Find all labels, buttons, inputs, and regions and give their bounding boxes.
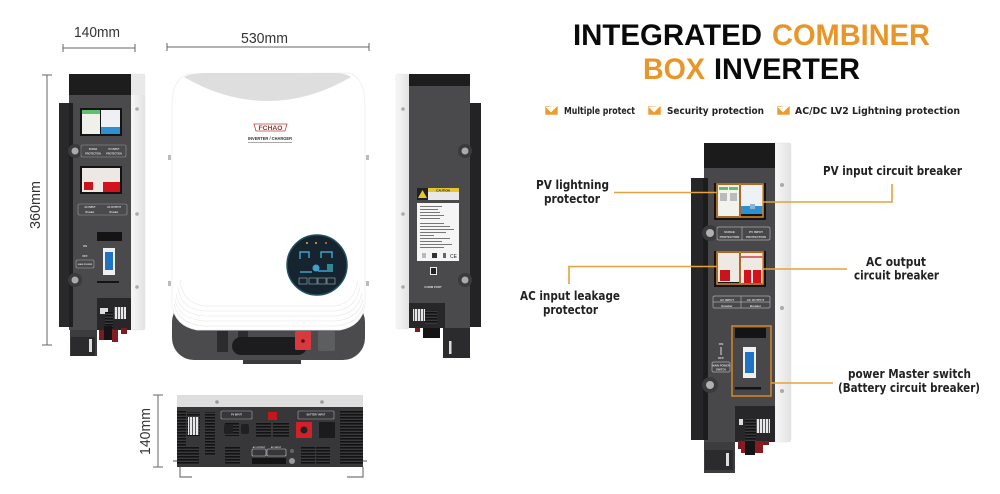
master switch: ON bbox=[719, 342, 723, 346]
callout: AC input leakage protector bbox=[520, 266, 717, 317]
master switch: SWITCH bbox=[716, 368, 726, 372]
bottom view: ports and labels: BATTERY INPUT bbox=[307, 414, 326, 416]
callout: PV input circuit breaker bbox=[763, 163, 963, 202]
left view: lower labels: AC INPUT bbox=[84, 206, 96, 209]
front view of inverter bbox=[168, 73, 369, 364]
master switch: OFF bbox=[718, 356, 724, 360]
left view: master switch: ON bbox=[83, 244, 87, 248]
left view: upper labels: PV INPUT bbox=[108, 148, 120, 151]
dimension: depth 140mm bottom view bbox=[138, 395, 163, 467]
lower labels: Breaker bbox=[750, 304, 762, 308]
bottom view: ports and labels bbox=[221, 411, 335, 464]
upper labels: PV INPUT bbox=[749, 230, 763, 234]
upper labels bbox=[717, 227, 770, 240]
left side view of inverter bbox=[59, 74, 145, 356]
callout: PV lightning protector: PV lightning bbox=[536, 177, 609, 192]
front view: brand logo bbox=[248, 124, 293, 143]
front view: brand logo: INVERTER / CHARGER bbox=[248, 136, 293, 141]
dimension: width 530mm: 530mm bbox=[241, 31, 288, 47]
left view: upper labels: SURGE bbox=[89, 148, 98, 151]
terminals bbox=[705, 406, 775, 470]
bottom view: vents bbox=[177, 410, 363, 465]
callout: AC output circuit breaker: circuit breaker bbox=[854, 268, 940, 282]
left view: lower labels: AC OUTPUT bbox=[107, 206, 122, 209]
callout: power master switch: power Master switch bbox=[848, 366, 971, 381]
dimension: depth 140mm: 140mm bbox=[74, 25, 120, 41]
feature list bbox=[545, 106, 960, 117]
bottom view: mounting feet bbox=[173, 461, 367, 477]
lower labels: AC INPUT bbox=[720, 298, 734, 302]
feature list: AC/DC LV2 Lightning protection bbox=[795, 106, 960, 117]
feature list: Security protection bbox=[667, 106, 764, 117]
dimension: depth 140mm bottom view: 140mm bbox=[138, 408, 154, 455]
callout: AC output circuit breaker bbox=[763, 254, 940, 282]
callout: PV lightning protector: protector bbox=[544, 191, 601, 206]
feature list: Multiple protect bbox=[564, 106, 635, 117]
left view: terminals bbox=[71, 298, 131, 356]
lower labels: Breaker bbox=[721, 304, 733, 308]
bottom view: ports and labels: AC OUTPUT bbox=[253, 446, 266, 449]
front view: base bbox=[172, 300, 365, 364]
left view: lower labels bbox=[78, 204, 127, 215]
left view: lower labels: Breaker bbox=[110, 211, 119, 214]
right view: comm port: COMM PORT bbox=[424, 285, 442, 289]
title: INVERTER bbox=[714, 53, 860, 86]
left view: upper labels bbox=[81, 145, 126, 157]
callout: PV lightning protector bbox=[536, 177, 717, 206]
upper labels: PROTECTION bbox=[720, 235, 739, 239]
front view: brand logo: FCHAO bbox=[258, 126, 283, 132]
left view: lower labels: Breaker bbox=[86, 211, 95, 214]
front view: round display bbox=[287, 235, 347, 295]
icon: check envelope bbox=[648, 106, 661, 115]
left view: master switch: MAIN POWER bbox=[78, 263, 93, 266]
dimension: width 530mm bbox=[167, 31, 369, 51]
icon: check envelope bbox=[777, 106, 790, 115]
lower labels: AC OUTPUT bbox=[747, 298, 764, 302]
bottom view: ports and labels: AC INPUT bbox=[271, 446, 282, 449]
right view: spec label bbox=[417, 203, 459, 261]
front view: grey top crescent bbox=[184, 73, 351, 101]
right side view of inverter bbox=[396, 74, 481, 358]
left view: upper labels: PROTECTION bbox=[106, 152, 122, 156]
lower breaker window bbox=[714, 251, 766, 287]
dimension: depth 140mm bbox=[63, 25, 135, 52]
upper breaker window bbox=[714, 183, 766, 220]
left view: master switch bbox=[76, 232, 122, 283]
upper labels: SURGE bbox=[724, 230, 735, 234]
callout: AC output circuit breaker: AC output bbox=[866, 254, 926, 269]
bottom view of inverter bbox=[173, 395, 367, 477]
master switch bbox=[712, 326, 771, 396]
right view: terminals bbox=[409, 303, 470, 358]
right view: comm port bbox=[424, 267, 442, 289]
dimension: height 360mm: 360mm bbox=[28, 181, 44, 229]
right view: spec label: CE bbox=[450, 254, 458, 260]
master switch: MAIN POWER bbox=[712, 364, 730, 368]
left view: upper breaker window bbox=[80, 108, 122, 136]
front view: white cover bbox=[172, 73, 365, 330]
title: COMBINER bbox=[772, 19, 930, 52]
dimension: height 360mm bbox=[28, 75, 52, 345]
upper labels: PROTECTION bbox=[746, 235, 766, 239]
front view: bottom ripple lines bbox=[174, 280, 364, 326]
icon: check envelope bbox=[545, 106, 558, 115]
title: INTEGRATED bbox=[573, 19, 762, 52]
right view: caution label: CAUTION bbox=[436, 188, 450, 192]
right view: caution label bbox=[417, 188, 459, 200]
callout: power master switch bbox=[771, 366, 980, 395]
main annotated inverter bbox=[691, 143, 791, 473]
title bbox=[573, 19, 930, 86]
title: BOX bbox=[643, 53, 705, 86]
lower labels bbox=[713, 296, 770, 308]
bottom view: ports and labels: PV INPUT bbox=[231, 414, 243, 416]
left view: lower breaker window bbox=[80, 166, 122, 194]
callout: AC input leakage protector: AC input leakage bbox=[520, 288, 620, 303]
left view: master switch: OFF bbox=[82, 254, 88, 258]
callout: AC input leakage protector: protector bbox=[543, 302, 599, 317]
left view: upper labels: PROTECTION bbox=[85, 152, 101, 156]
callout: PV input circuit breaker: PV input circuit breaker bbox=[823, 163, 963, 178]
